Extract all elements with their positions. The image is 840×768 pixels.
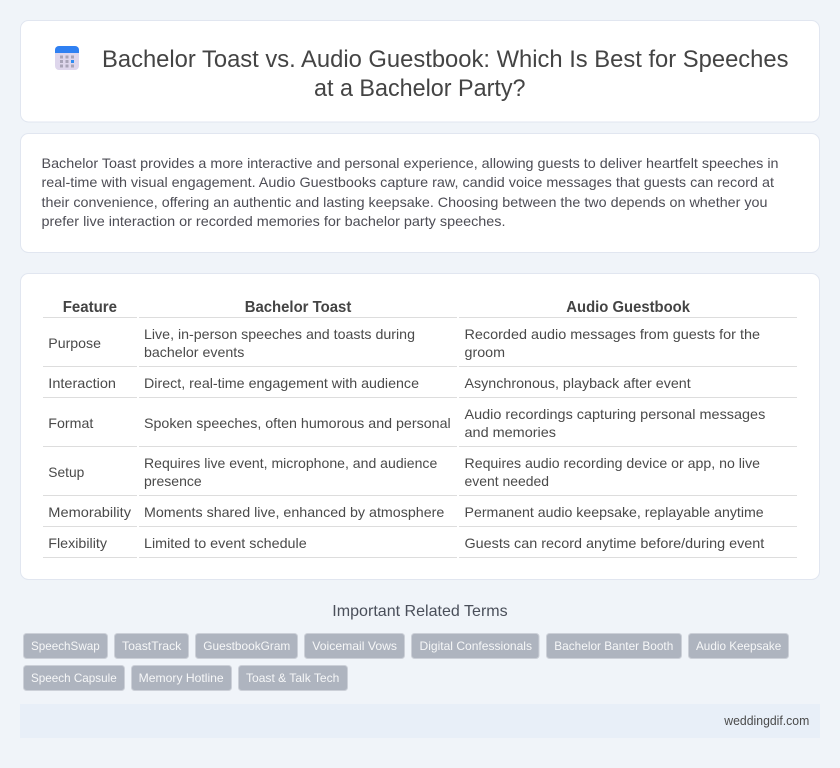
table header row: Audio Guestbook xyxy=(566,299,690,316)
tag: Bachelor Banter Booth xyxy=(546,634,682,658)
table row: format: and memories xyxy=(464,424,556,440)
icon: calendar xyxy=(55,46,79,70)
tag: Audio Keepsake: Audio Keepsake xyxy=(696,639,782,653)
table row: setup: Requires audio recording device or app, no live xyxy=(464,455,760,471)
table row: setup: Requires live event, microphone, and audience xyxy=(144,455,438,471)
table row: purpose xyxy=(43,326,797,367)
table header row: Feature xyxy=(63,299,117,316)
table row: flexibility: Limited to event schedule xyxy=(144,535,307,551)
tag: Toast & Talk Tech: Toast & Talk Tech xyxy=(246,671,339,685)
table row: memorability: Moments shared live, enhanced by atmosphere xyxy=(144,504,445,520)
tag: ToastTrack xyxy=(114,634,188,658)
table row: setup: Setup xyxy=(48,464,85,480)
table header row: Bachelor Toast xyxy=(245,299,352,316)
tag: Digital Confessionals: Digital Confessionals xyxy=(420,639,532,653)
table row: purpose: Recorded audio messages from guests for the xyxy=(464,326,760,342)
table row: purpose: Purpose xyxy=(48,335,101,351)
panel: intro text card xyxy=(20,134,820,252)
table row: interaction: Interaction xyxy=(48,375,116,391)
tag: ToastTrack: ToastTrack xyxy=(122,639,182,653)
table row: setup: presence xyxy=(144,473,202,489)
tag: GuestbookGram: GuestbookGram xyxy=(203,639,290,653)
tags: related terms xyxy=(24,634,788,690)
table header row xyxy=(43,299,797,318)
tag: Speech Capsule: Speech Capsule xyxy=(31,671,117,685)
intro paragraph: real-time with visual engagement. Audio Guestbooks capture raw, candid voice messages that guests can record at xyxy=(42,174,774,190)
table row: interaction: Asynchronous, playback after event xyxy=(464,375,691,391)
table row: purpose: groom xyxy=(464,344,505,360)
intro paragraph: Bachelor Toast provides a more interactive and personal experience, allowing guests to deliver heartfelt speeches in xyxy=(42,155,778,171)
footer bar: weddingdif.com xyxy=(723,713,809,728)
table row: format: Format xyxy=(48,415,93,431)
table row: format: Audio recordings capturing personal messages xyxy=(464,406,765,422)
panel: header card xyxy=(20,20,820,122)
table row: interaction xyxy=(43,375,797,398)
tag: Digital Confessionals xyxy=(412,634,539,658)
table row: format xyxy=(43,406,797,447)
table row: flexibility xyxy=(43,535,797,558)
title: at a Bachelor Party? xyxy=(314,75,526,102)
tag: Bachelor Banter Booth: Bachelor Banter Booth xyxy=(554,639,673,653)
tag: SpeechSwap xyxy=(24,634,108,658)
table row: interaction: Direct, real-time engagement with audience xyxy=(144,375,419,391)
tag: SpeechSwap: SpeechSwap xyxy=(31,639,100,653)
table row: purpose: bachelor events xyxy=(144,344,244,360)
intro paragraph: their convenience, offering an authentic and lasting keepsake. Choosing between the two depends on whether you xyxy=(42,194,768,210)
table row: memorability xyxy=(43,504,797,527)
tag: Audio Keepsake xyxy=(688,634,788,658)
tag: Voicemail Vows: Voicemail Vows xyxy=(312,639,397,653)
tag: Speech Capsule xyxy=(24,666,124,690)
title xyxy=(102,46,788,102)
heading: important related terms: Important Related Terms xyxy=(332,603,508,620)
table row: purpose: Live, in-person speeches and toasts during xyxy=(144,326,415,342)
table row: setup xyxy=(43,455,797,496)
intro paragraph xyxy=(42,155,778,229)
table row: memorability: Permanent audio keepsake, replayable anytime xyxy=(464,504,764,520)
table row: memorability: Memorability xyxy=(48,504,131,520)
table row: flexibility: Flexibility xyxy=(48,535,107,551)
tag: Memory Hotline xyxy=(132,666,232,690)
tag: Memory Hotline: Memory Hotline xyxy=(139,671,224,685)
table row: flexibility: Guests can record anytime before/during event xyxy=(464,535,764,551)
footer bar xyxy=(20,704,820,738)
tag: GuestbookGram xyxy=(196,634,298,658)
tag: Voicemail Vows xyxy=(304,634,404,658)
table row: format: Spoken speeches, often humorous and personal xyxy=(144,415,451,431)
tag: Toast & Talk Tech xyxy=(238,666,348,690)
title: Bachelor Toast vs. Audio Guestbook: Which Is Best for Speeches xyxy=(102,46,788,73)
table row: setup: event needed xyxy=(464,473,549,489)
panel: comparison table card xyxy=(20,274,820,580)
intro paragraph: prefer live interaction or recorded memories for bachelor party speeches. xyxy=(42,213,506,229)
